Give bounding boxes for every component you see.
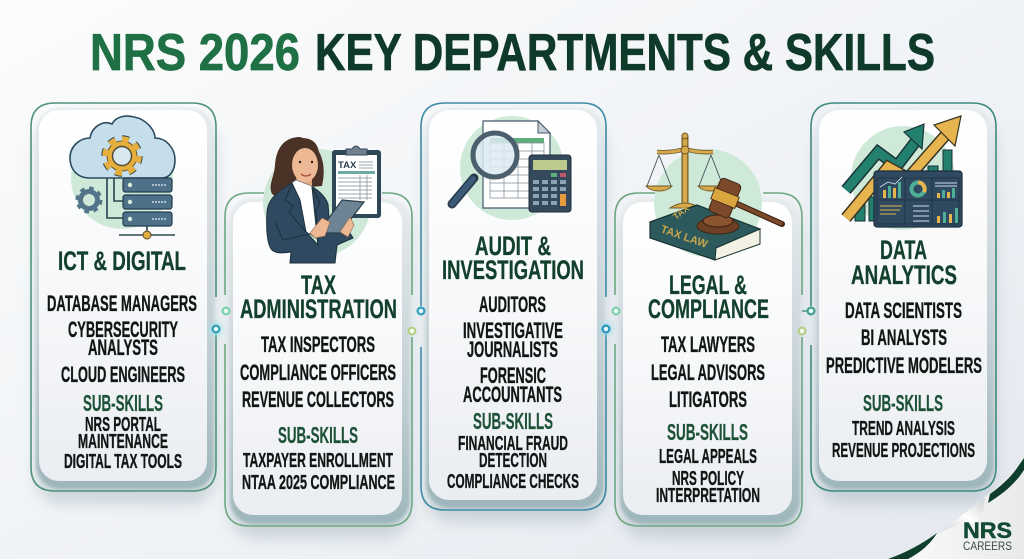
panel: Tax Administration [225, 137, 412, 538]
roles list: ACCOUNTANTS [463, 382, 562, 407]
title: NRS 2026 [90, 24, 300, 82]
sub-skills list [447, 432, 579, 493]
heading [442, 231, 584, 285]
heading: LEGAL & [669, 270, 747, 300]
icon: woman with tax clipboard [263, 137, 381, 263]
panel: Data Analytics [811, 103, 996, 504]
heading: AUDIT & [475, 231, 551, 261]
roles list: DATABASE MANAGERS [47, 291, 197, 316]
icon: scales, law book, gavel: TAX [671, 203, 691, 222]
roles list [826, 298, 982, 378]
icon: cloud server [70, 116, 175, 239]
panel: Audit & Investigation [421, 103, 606, 522]
heading [851, 235, 957, 290]
panel: Legal & Compliance [615, 133, 802, 538]
panel: ICT & Digital [31, 103, 216, 504]
sub-skills heading: SUB-SKILLS [473, 408, 553, 434]
logo: NRS Careers: NRS [963, 518, 1012, 543]
heading: ICT & DIGITAL [58, 246, 186, 276]
sub-skills list: NRS PORTAL [85, 413, 161, 436]
sub-skills list: TAXPAYER ENROLLMENT [243, 449, 393, 472]
sub-skills list: NTAA 2025 COMPLIANCE [242, 471, 395, 494]
heading: ANALYTICS [851, 260, 957, 290]
roles list: LEGAL ADVISORS [651, 360, 765, 385]
sub-skills heading: SUB-SKILLS [863, 390, 943, 416]
roles list: COMPLIANCE OFFICERS [240, 360, 396, 385]
sub-skills heading: SUB-SKILLS [667, 419, 748, 445]
roles list: LITIGATORS [669, 387, 747, 412]
roles list: CYBERSECURITY [68, 317, 178, 342]
sub-skills list [656, 445, 760, 507]
logo: NRS Careers [963, 518, 1012, 553]
sub-skills list: NRS POLICY [672, 467, 744, 490]
sub-skills heading: SUB-SKILLS [278, 422, 358, 448]
sub-skills list: DETECTION [479, 449, 547, 472]
roles list: CLOUD ENGINEERS [61, 362, 185, 387]
heading: COMPLIANCE [648, 294, 769, 324]
roles list: TAX INSPECTORS [261, 332, 375, 357]
sub-skills list: MAINTENANCE [78, 430, 168, 453]
roles list: BI ANALYSTS [861, 325, 947, 350]
sub-skills list [64, 413, 182, 473]
sub-skills list [832, 417, 975, 462]
icon: growth arrows and dashboard [846, 116, 962, 230]
icon: magnifier, spreadsheet, calculator [452, 116, 571, 220]
icon: scales, law book, gavel: TAX LAW [659, 223, 710, 251]
heading [240, 270, 397, 324]
roles list [47, 291, 197, 387]
sub-skills list: COMPLIANCE CHECKS [447, 470, 579, 493]
roles list: ANALYSTS [88, 335, 158, 360]
sub-skills heading: SUB-SKILLS [83, 390, 163, 416]
sub-skills list: DIGITAL TAX TOOLS [64, 450, 182, 473]
sub-skills list: INTERPRETATION [656, 484, 760, 507]
sub-skills list: FINANCIAL FRAUD [458, 432, 568, 455]
roles list: AUDITORS [479, 292, 546, 317]
heading [648, 270, 769, 324]
connector nodes [210, 308, 814, 335]
roles list: REVENUE COLLECTORS [242, 387, 394, 412]
roles list: INVESTIGATIVE [463, 318, 563, 343]
roles list [463, 292, 563, 407]
roles list: JOURNALISTS [467, 337, 558, 362]
sub-skills list: LEGAL APPEALS [659, 445, 757, 468]
icon: scales, law book, gavel [646, 133, 782, 260]
heading: ADMINISTRATION [240, 294, 397, 324]
page curl corner [888, 455, 1024, 559]
roles list [651, 332, 765, 412]
sub-skills list [242, 449, 395, 494]
icon: woman with tax clipboard: TAX [338, 160, 357, 171]
heading: INVESTIGATION [442, 255, 584, 285]
roles list: TAX LAWYERS [661, 332, 755, 357]
heading: DATA [880, 235, 927, 265]
title [90, 24, 935, 82]
heading: TAX [301, 270, 336, 300]
roles list: FORENSIC [480, 363, 546, 388]
roles list [240, 332, 396, 412]
logo: NRS Careers: CAREERS [963, 541, 1012, 553]
